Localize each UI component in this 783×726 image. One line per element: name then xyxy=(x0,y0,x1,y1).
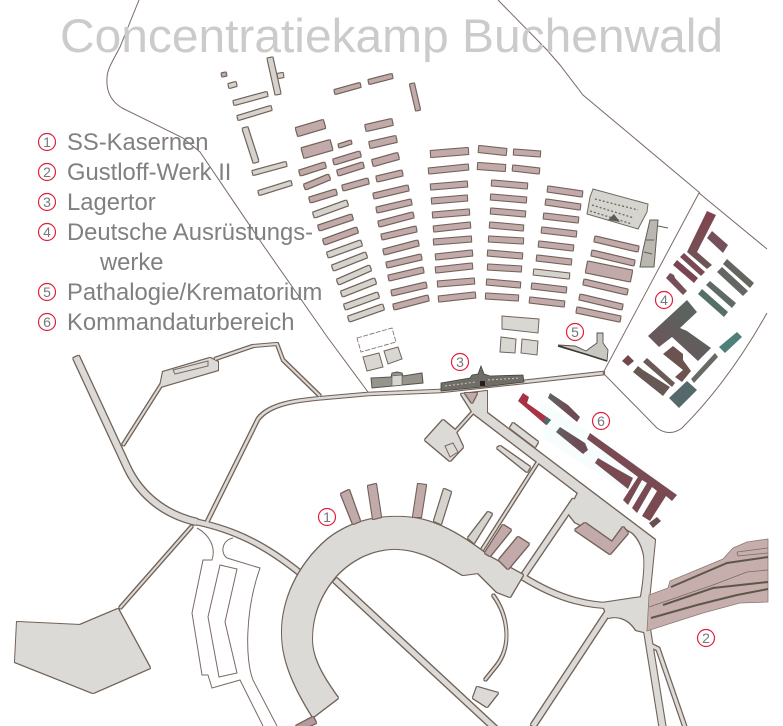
map marker 4: 4 xyxy=(660,292,668,308)
panel: SS barracks crescent xyxy=(282,517,523,717)
legend item 2: 2 xyxy=(43,164,51,180)
barracks column 1 xyxy=(297,124,383,319)
Lagertor gate building xyxy=(441,366,524,391)
barracks column 4 xyxy=(478,149,540,298)
large factory building xyxy=(587,189,668,267)
road network xyxy=(15,344,686,726)
map marker 6: 6 xyxy=(597,413,605,429)
legend item 4: Deutsche Ausrüstungs- xyxy=(67,219,313,246)
map marker 2: 2 xyxy=(702,630,710,646)
map marker 3 xyxy=(452,354,468,370)
SS-Kasernen wings xyxy=(296,393,628,726)
west gatehouse building xyxy=(371,372,423,388)
Gustloff-Werk II railway area xyxy=(647,539,768,631)
Kommandaturbereich buildings xyxy=(518,393,677,528)
barracks column 5 xyxy=(530,189,582,304)
Kommandatur area tint xyxy=(540,400,660,500)
map marker 6 xyxy=(592,412,610,430)
map marker 2 xyxy=(698,630,714,646)
legend item 3: Lagertor xyxy=(67,189,156,216)
camp perimeter fence xyxy=(107,0,700,392)
map marker 1 xyxy=(318,508,336,526)
legend item 4: werke xyxy=(99,249,163,276)
gray blocks near south of barracks xyxy=(357,316,539,371)
map marker 1: 1 xyxy=(323,509,331,525)
Deutsche Ausruestungswerke buildings xyxy=(622,211,754,408)
legend item 1: SS-Kasernen xyxy=(67,129,209,156)
legend item 4: 4 xyxy=(43,224,51,240)
map marker 4 xyxy=(656,292,672,308)
Deutsche Ausruestungswerke site boundary xyxy=(603,193,767,432)
Pathologie / Krematorium building xyxy=(558,333,608,361)
barracks column 2 xyxy=(366,122,428,307)
prisoner barracks, north-west gray and pink group xyxy=(222,58,418,193)
legend item 6: Kommandaturbereich xyxy=(67,309,295,336)
legend item 6: 6 xyxy=(43,314,51,330)
title: Concentratiekamp Buchenwald xyxy=(60,10,723,63)
barracks column 3 xyxy=(429,151,475,299)
parking outline near forecourt xyxy=(173,361,458,726)
legend item 5: 5 xyxy=(43,284,51,300)
barracks column 6 xyxy=(577,239,638,319)
legend item 3: 3 xyxy=(43,194,51,210)
map marker 3: 3 xyxy=(456,354,464,370)
legend xyxy=(38,129,322,336)
legend item 1: 1 xyxy=(43,134,51,150)
map marker 5: 5 xyxy=(571,324,579,340)
map marker 5 xyxy=(566,324,584,340)
legend item 2: Gustloff-Werk II xyxy=(67,159,231,186)
legend item 4 xyxy=(38,219,313,276)
legend item 5: Pathalogie/Krematorium xyxy=(67,279,322,306)
